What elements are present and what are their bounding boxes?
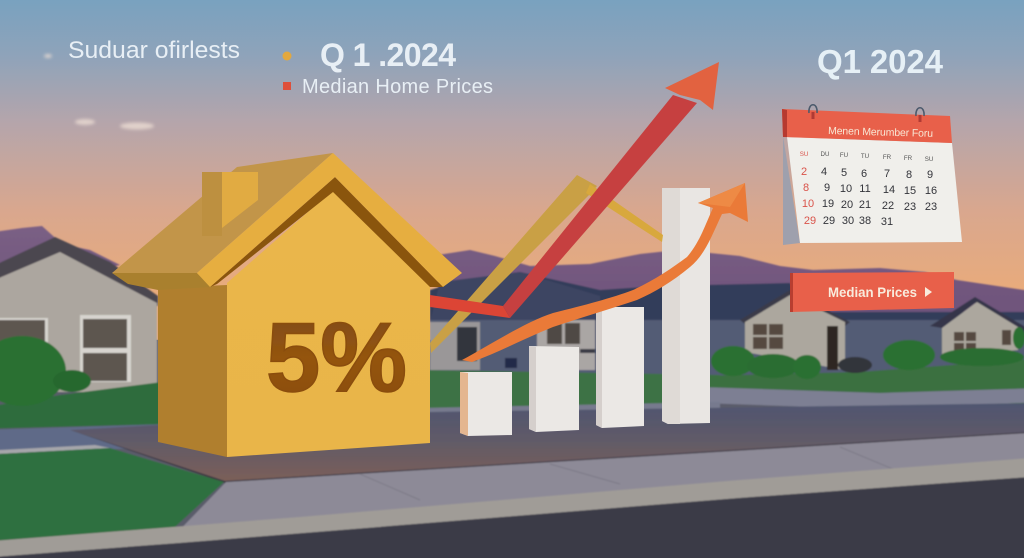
date grid: 30 bbox=[842, 215, 854, 227]
button: median prices bbox=[790, 272, 954, 312]
date grid: 22 bbox=[882, 200, 894, 212]
front wall bbox=[227, 190, 430, 457]
front lawn bbox=[0, 448, 224, 542]
date grid: 16 bbox=[925, 185, 937, 197]
back pages bbox=[783, 136, 800, 245]
date grid: 14 bbox=[883, 184, 895, 196]
ground base bbox=[0, 340, 1024, 558]
calendar rings bbox=[809, 105, 924, 122]
background neighbourhood bbox=[0, 226, 1024, 558]
bar 3 bbox=[596, 307, 644, 428]
date grid bbox=[801, 166, 937, 228]
date grid: 2 bbox=[801, 166, 807, 178]
quarter heading: Q 1 .2024 bbox=[320, 37, 456, 73]
date grid: 11 bbox=[859, 183, 871, 195]
roof fascia bbox=[197, 153, 462, 287]
date grid: 38 bbox=[859, 215, 871, 227]
side wall bbox=[158, 285, 227, 457]
sidewalk bbox=[170, 432, 1024, 540]
icon: red square bbox=[283, 82, 291, 90]
bar 4 bbox=[662, 188, 710, 424]
curb bbox=[0, 457, 1024, 558]
eave shadow bbox=[210, 177, 443, 287]
button: median prices: Median Prices bbox=[828, 284, 917, 300]
far left house bbox=[0, 237, 158, 392]
icon: yellow dot bbox=[282, 52, 292, 60]
clouds bbox=[44, 54, 154, 130]
percentage label: 5% bbox=[266, 302, 407, 412]
bar 2 bbox=[529, 346, 579, 432]
date grid: 6 bbox=[861, 168, 867, 180]
date grid: 23 bbox=[925, 201, 937, 213]
date grid: 29 bbox=[804, 215, 816, 227]
weekday labels: DU bbox=[821, 151, 829, 158]
date grid: 9 bbox=[824, 182, 830, 194]
sky background bbox=[0, 0, 1024, 340]
paths and pavement bbox=[700, 387, 1024, 409]
subheading: median home prices: Median Home Prices bbox=[302, 76, 493, 98]
weekday labels: SU bbox=[800, 151, 808, 158]
date grid: 8 bbox=[803, 182, 809, 194]
date grid: 15 bbox=[904, 185, 916, 197]
left heading: Suduar ofirlests bbox=[68, 37, 240, 64]
date grid: 5 bbox=[841, 167, 847, 179]
date grid: 4 bbox=[821, 166, 827, 178]
red arrow bbox=[430, 62, 719, 318]
calendar bbox=[782, 105, 962, 245]
roof plane bbox=[112, 153, 333, 273]
date grid: 9 bbox=[927, 169, 933, 181]
bushes bbox=[0, 327, 1024, 406]
road bbox=[0, 476, 1024, 558]
lawns bbox=[420, 370, 720, 410]
calendar title: Menen Merumber Foru bbox=[828, 125, 933, 140]
date grid: 10 bbox=[802, 198, 814, 210]
date grid: 23 bbox=[904, 201, 916, 213]
date grid: 21 bbox=[859, 199, 871, 211]
calendar body bbox=[787, 137, 962, 243]
weekday labels bbox=[800, 151, 933, 163]
chimney bbox=[202, 172, 258, 236]
date grid: 10 bbox=[840, 183, 852, 195]
arrow head bbox=[665, 62, 719, 110]
ground platform bbox=[70, 403, 1024, 481]
bar 1 bbox=[460, 372, 512, 436]
date grid: 8 bbox=[906, 169, 912, 181]
eave underside bbox=[112, 273, 212, 290]
orange arrow bbox=[462, 183, 748, 362]
date grid: 7 bbox=[884, 168, 890, 180]
right house A bbox=[740, 290, 850, 370]
date grid: 19 bbox=[822, 198, 834, 210]
right house B bbox=[930, 297, 1024, 358]
weekday labels: FR bbox=[883, 154, 892, 161]
yellow trend line bbox=[430, 175, 663, 353]
weekday labels: FR bbox=[904, 155, 913, 162]
weekday labels: TU bbox=[861, 153, 869, 160]
weekday labels: SU bbox=[925, 156, 933, 163]
icon: play triangle bbox=[925, 287, 932, 297]
house with 5% bbox=[112, 153, 462, 457]
calendar header bbox=[782, 109, 952, 143]
date grid: 29 bbox=[823, 215, 835, 227]
mountains bbox=[0, 226, 1024, 340]
weekday labels: FU bbox=[840, 152, 848, 159]
right heading: Q1 2024: Q1 2024 bbox=[817, 43, 944, 80]
date grid: 20 bbox=[841, 199, 853, 211]
middle houses and long roof bbox=[430, 272, 1024, 376]
bar chart bbox=[460, 188, 710, 436]
date grid: 31 bbox=[881, 216, 893, 228]
